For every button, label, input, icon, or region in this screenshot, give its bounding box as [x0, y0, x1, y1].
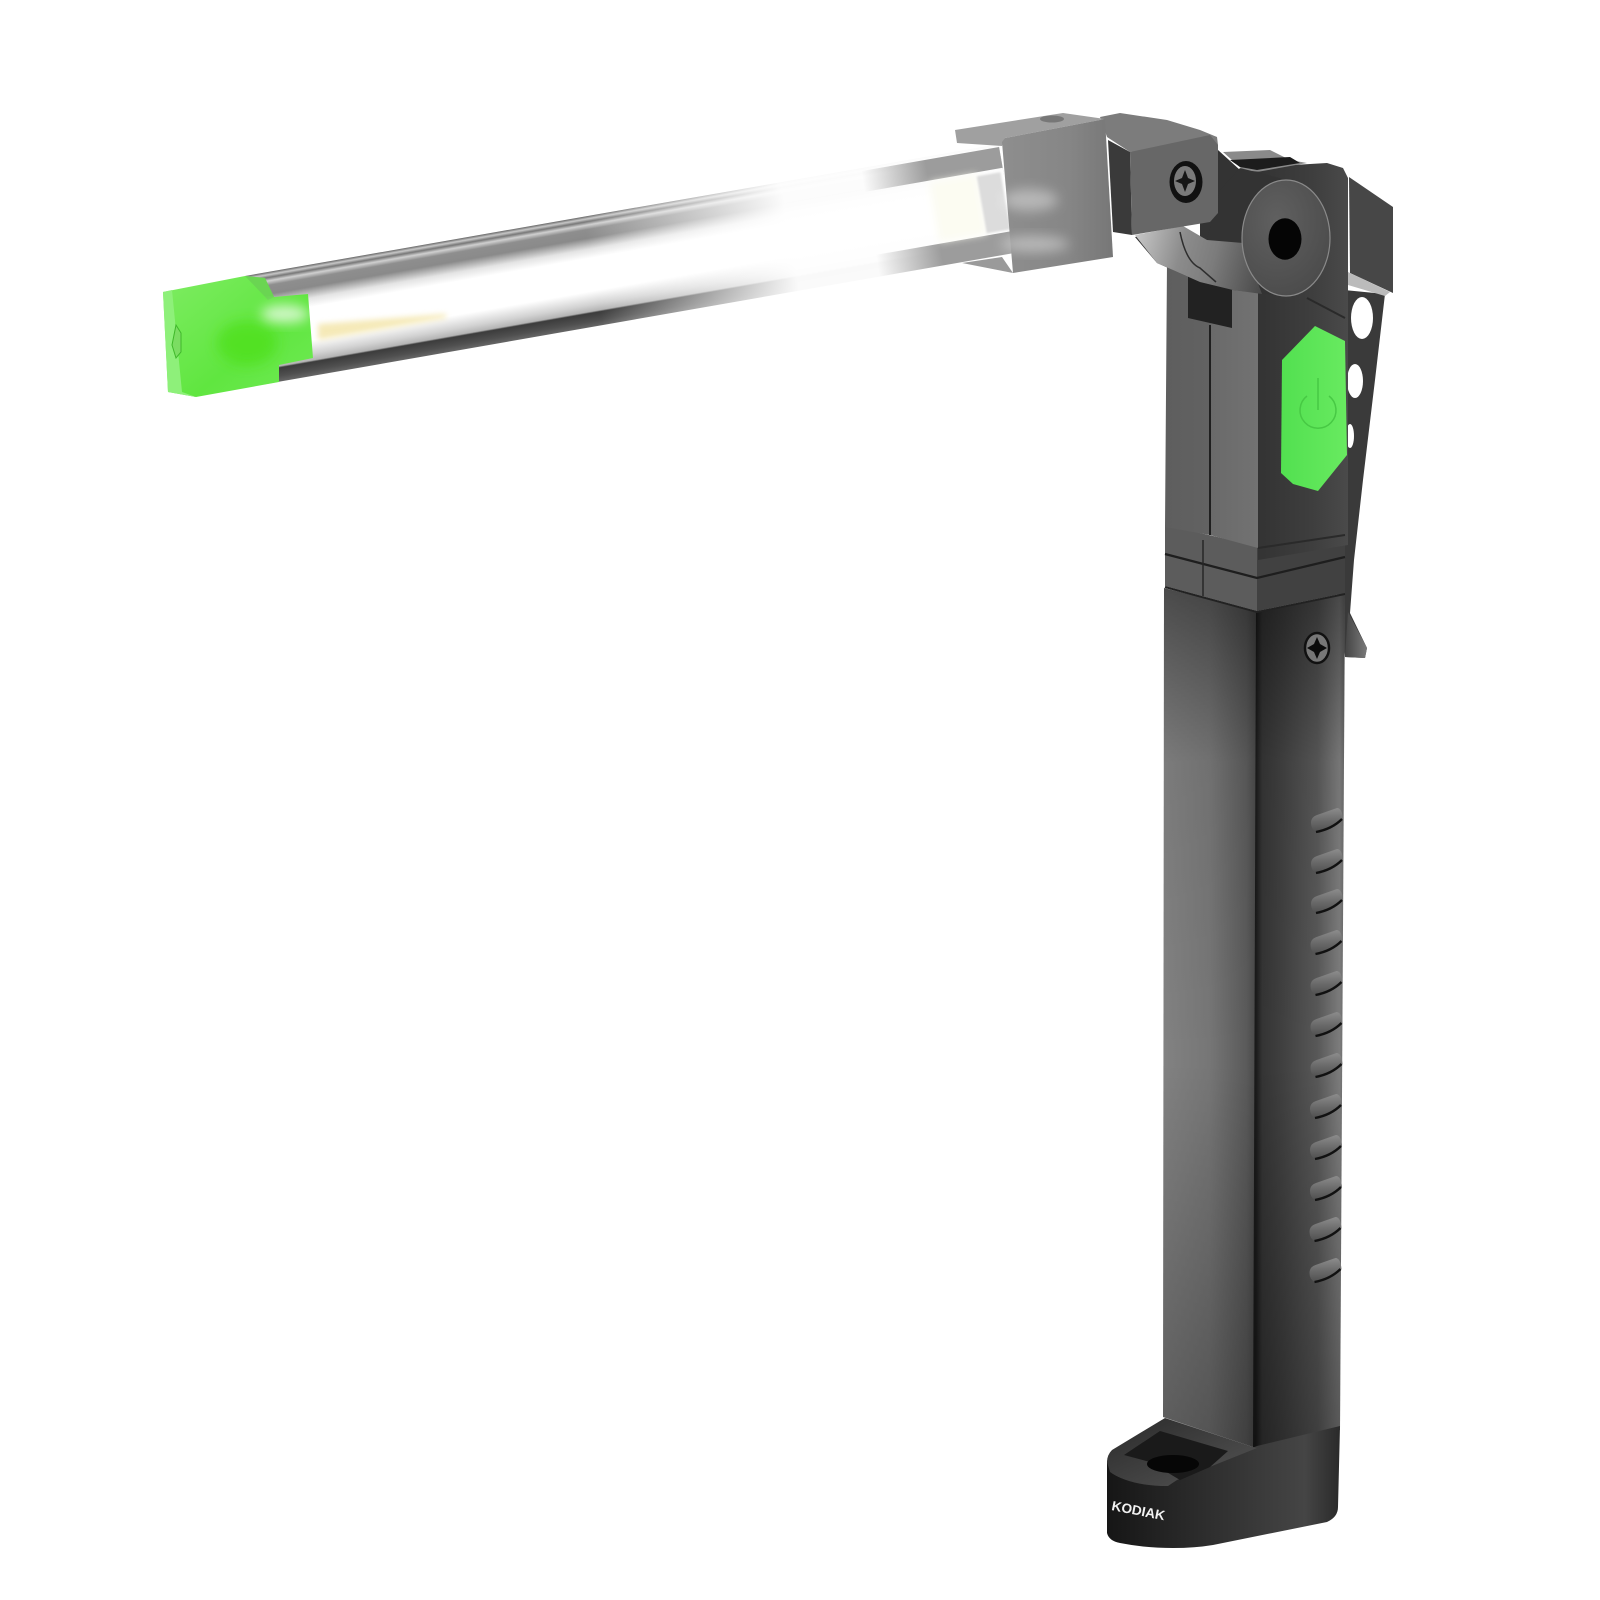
head: left face	[1165, 262, 1258, 548]
brand label: KODIAK: KODIAK	[1110, 1498, 1167, 1523]
collar between handle and head	[1165, 525, 1345, 612]
screw: pivot	[1170, 161, 1202, 203]
barrel end face	[1242, 180, 1330, 296]
base: screw hole	[1147, 1455, 1199, 1473]
head: side notch	[1188, 272, 1232, 328]
power button	[1281, 326, 1347, 491]
base: top surface	[1107, 1418, 1257, 1486]
LED strip warm streak	[318, 314, 446, 340]
clip: spring clip behind head	[1338, 177, 1393, 658]
hinge: dark pivot block	[1100, 113, 1218, 235]
light bar: green end cap	[163, 276, 313, 397]
hinge: translucent grey block	[955, 113, 1113, 273]
screw: handle	[1305, 633, 1329, 663]
icon: power symbol	[1300, 378, 1336, 428]
light bar: aluminium extrusion	[244, 140, 1018, 388]
barrel hole	[1268, 218, 1302, 260]
hinge: swivel barrel	[1100, 113, 1330, 296]
base: recess	[1124, 1431, 1228, 1480]
base: foot with mounting hole	[1107, 1418, 1340, 1548]
icon: cap lens	[172, 325, 181, 358]
head: right face	[1223, 150, 1348, 560]
grip grooves	[1310, 808, 1343, 1282]
handle: main body	[1163, 588, 1345, 1448]
